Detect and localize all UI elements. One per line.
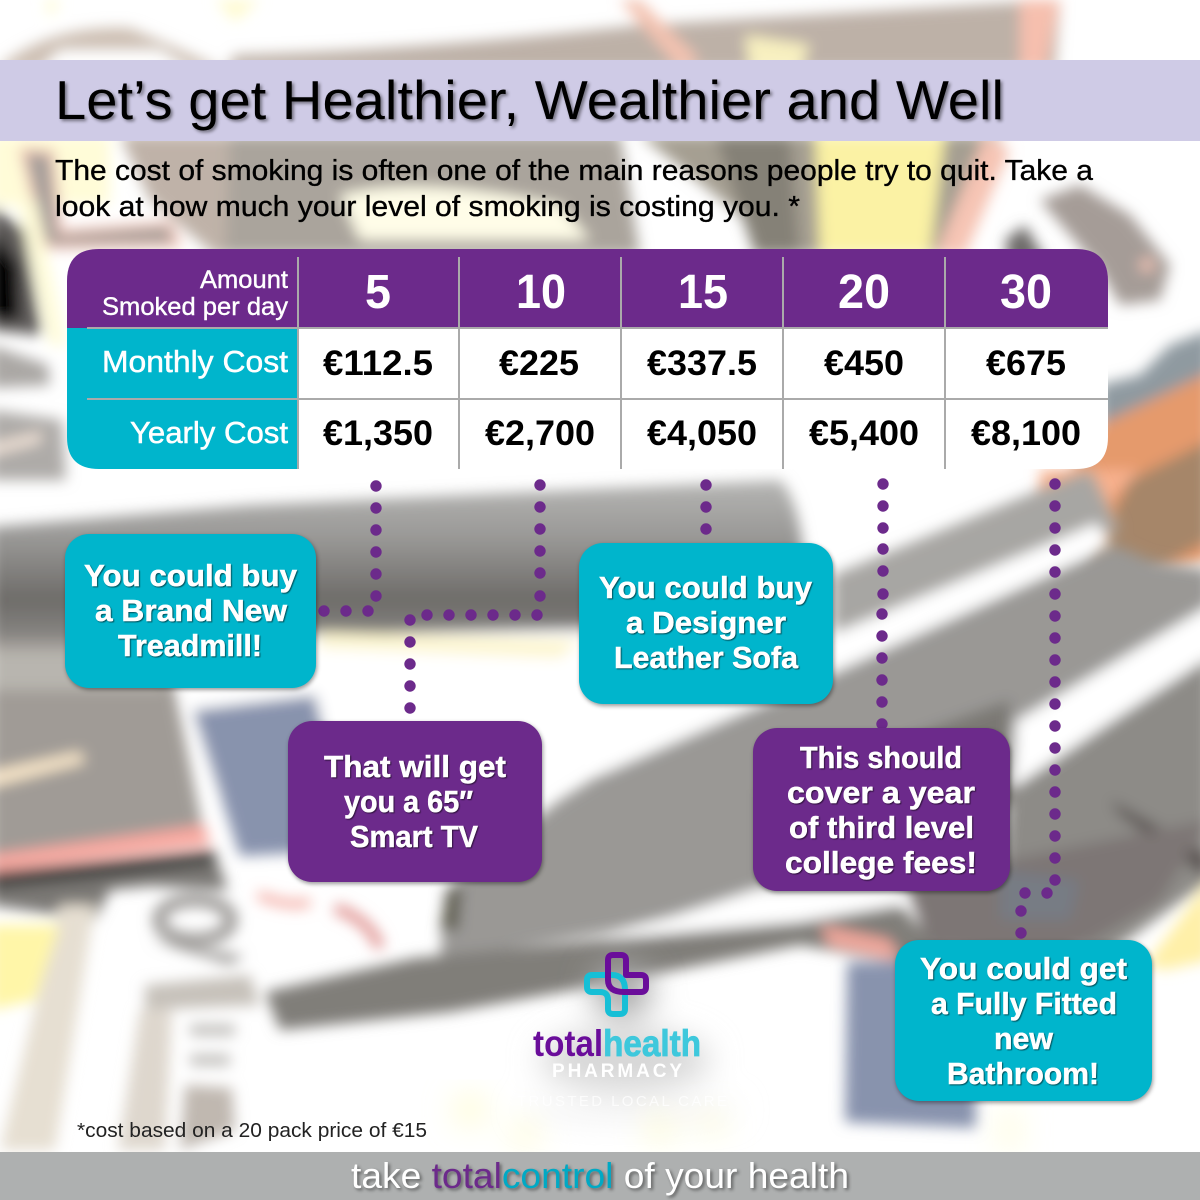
dotted connector: 20 a day to college fees — [876, 478, 889, 730]
callout: bathroom: Bathroom! — [947, 1056, 1099, 1091]
callout: smart TV: Smart TV — [350, 819, 478, 854]
yearly costs — [323, 414, 1081, 453]
footnote: *cost based on a 20 pack price of €15 — [77, 1119, 427, 1142]
table header numbers: 20 — [838, 266, 890, 319]
callout: college fees: This should — [800, 740, 962, 775]
dotted connector: 10 a day to TV — [404, 479, 546, 714]
yearly costs: €5,400 — [809, 414, 919, 453]
cost table — [67, 249, 1108, 469]
monthly costs: €675 — [986, 344, 1066, 383]
logo subtitle: PHARMACY — [552, 1061, 682, 1082]
monthly costs: €112.5 — [323, 344, 433, 383]
table header numbers: 30 — [1000, 266, 1052, 319]
logo: Total Health Pharmacy — [517, 955, 727, 1110]
right side cigarette tips — [1040, 330, 1200, 610]
callout: treadmill: You could buy — [84, 558, 298, 593]
callout: smart TV: you a 65″ — [344, 784, 473, 819]
intro paragraph: look at how much your level of smoking is costing you. * — [55, 191, 800, 223]
intro paragraph — [55, 155, 1094, 223]
title: Let’s get Healthier, Wealthier and Well — [55, 69, 1004, 131]
callout: college fees: of third level — [789, 810, 974, 845]
table header numbers: 10 — [516, 266, 566, 319]
yearly costs: €1,350 — [323, 414, 433, 453]
callout: sofa: Leather Sofa — [614, 640, 799, 675]
callout: sofa: a Designer — [626, 605, 786, 640]
callout: college fees: college fees! — [785, 845, 977, 880]
dotted connector: 30 a day to bathroom — [1015, 478, 1061, 939]
callout: treadmill — [65, 534, 316, 688]
table row labels: Smoked per day — [102, 293, 289, 321]
logo tagline: TRUSTED LOCAL CARE — [517, 1093, 727, 1110]
yearly costs: €4,050 — [647, 414, 757, 453]
callout: bathroom — [895, 940, 1152, 1101]
monthly costs: €450 — [824, 344, 904, 383]
monthly costs — [323, 344, 1066, 383]
table row labels: Amount — [200, 266, 288, 294]
dotted connector: 15 a day to sofa — [700, 479, 712, 535]
callout: smart TV: That will get — [324, 749, 506, 784]
footer banner — [0, 1152, 1200, 1200]
callout: sofa: You could buy — [599, 570, 813, 605]
yearly costs: €2,700 — [485, 414, 595, 453]
callout: sofa — [579, 543, 833, 704]
table header numbers: 5 — [365, 266, 391, 319]
monthly costs: €225 — [499, 344, 579, 383]
callout: bathroom: You could get — [920, 951, 1127, 986]
yearly costs: €8,100 — [971, 414, 1081, 453]
title banner — [0, 60, 1200, 141]
monthly costs: €337.5 — [647, 344, 757, 383]
callout: college fees — [753, 728, 1010, 891]
table row labels: Monthly Cost — [102, 344, 288, 379]
footer slogan: take totalcontrol of your health — [351, 1155, 849, 1196]
table header numbers: 15 — [678, 266, 728, 319]
callout: bathroom: new — [994, 1021, 1054, 1056]
dotted connector: 5 a day to treadmill — [318, 480, 382, 617]
callout: smart TV — [288, 721, 542, 882]
callout: college fees: cover a year — [787, 775, 975, 810]
table header numbers — [365, 266, 1052, 319]
callout: treadmill: Treadmill! — [118, 628, 262, 663]
intro paragraph: The cost of smoking is often one of the main reasons people try to quit. Take a — [55, 155, 1094, 187]
table row labels: Yearly Cost — [130, 415, 288, 450]
icon: interlaced cross — [587, 955, 646, 1014]
callout: treadmill: a Brand New — [95, 593, 288, 628]
table row labels — [102, 266, 289, 450]
logo wordmark: totalhealth — [533, 1023, 701, 1064]
callout: bathroom: a Fully Fitted — [931, 986, 1117, 1021]
